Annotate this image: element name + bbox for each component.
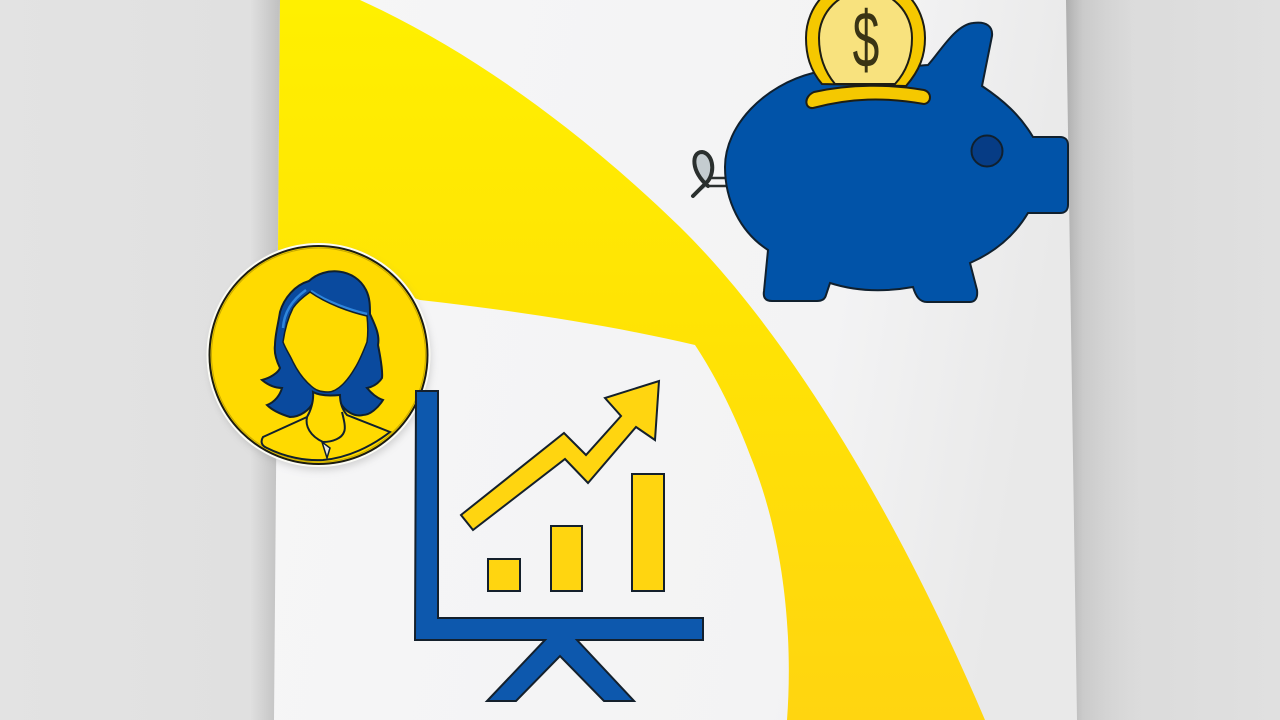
pig eye: [972, 136, 1002, 166]
coin slot: [806, 86, 930, 108]
rising arrow: [461, 381, 659, 530]
face: [283, 292, 368, 392]
coin: [806, 0, 925, 86]
white sheet: [274, 0, 1077, 720]
icon: piggy bank: [693, 0, 1068, 302]
icon: growth chart on stand: [415, 381, 703, 701]
collar: [307, 412, 345, 442]
pig body: [725, 23, 1068, 302]
bar 1: [488, 559, 520, 591]
avatar shadow: [209, 248, 431, 470]
pig tail: [693, 152, 726, 196]
neck and shoulders: [262, 392, 390, 460]
badge circle: [206, 243, 430, 467]
bar 2: [551, 526, 582, 591]
hair highlight: [283, 290, 367, 328]
bar 3: [632, 474, 664, 591]
hair: [262, 271, 383, 417]
sheet shadow: [250, 0, 1142, 720]
chart frame and stand: [415, 391, 703, 701]
icon: woman avatar badge: [206, 243, 430, 467]
yellow arc band: [278, 0, 985, 720]
